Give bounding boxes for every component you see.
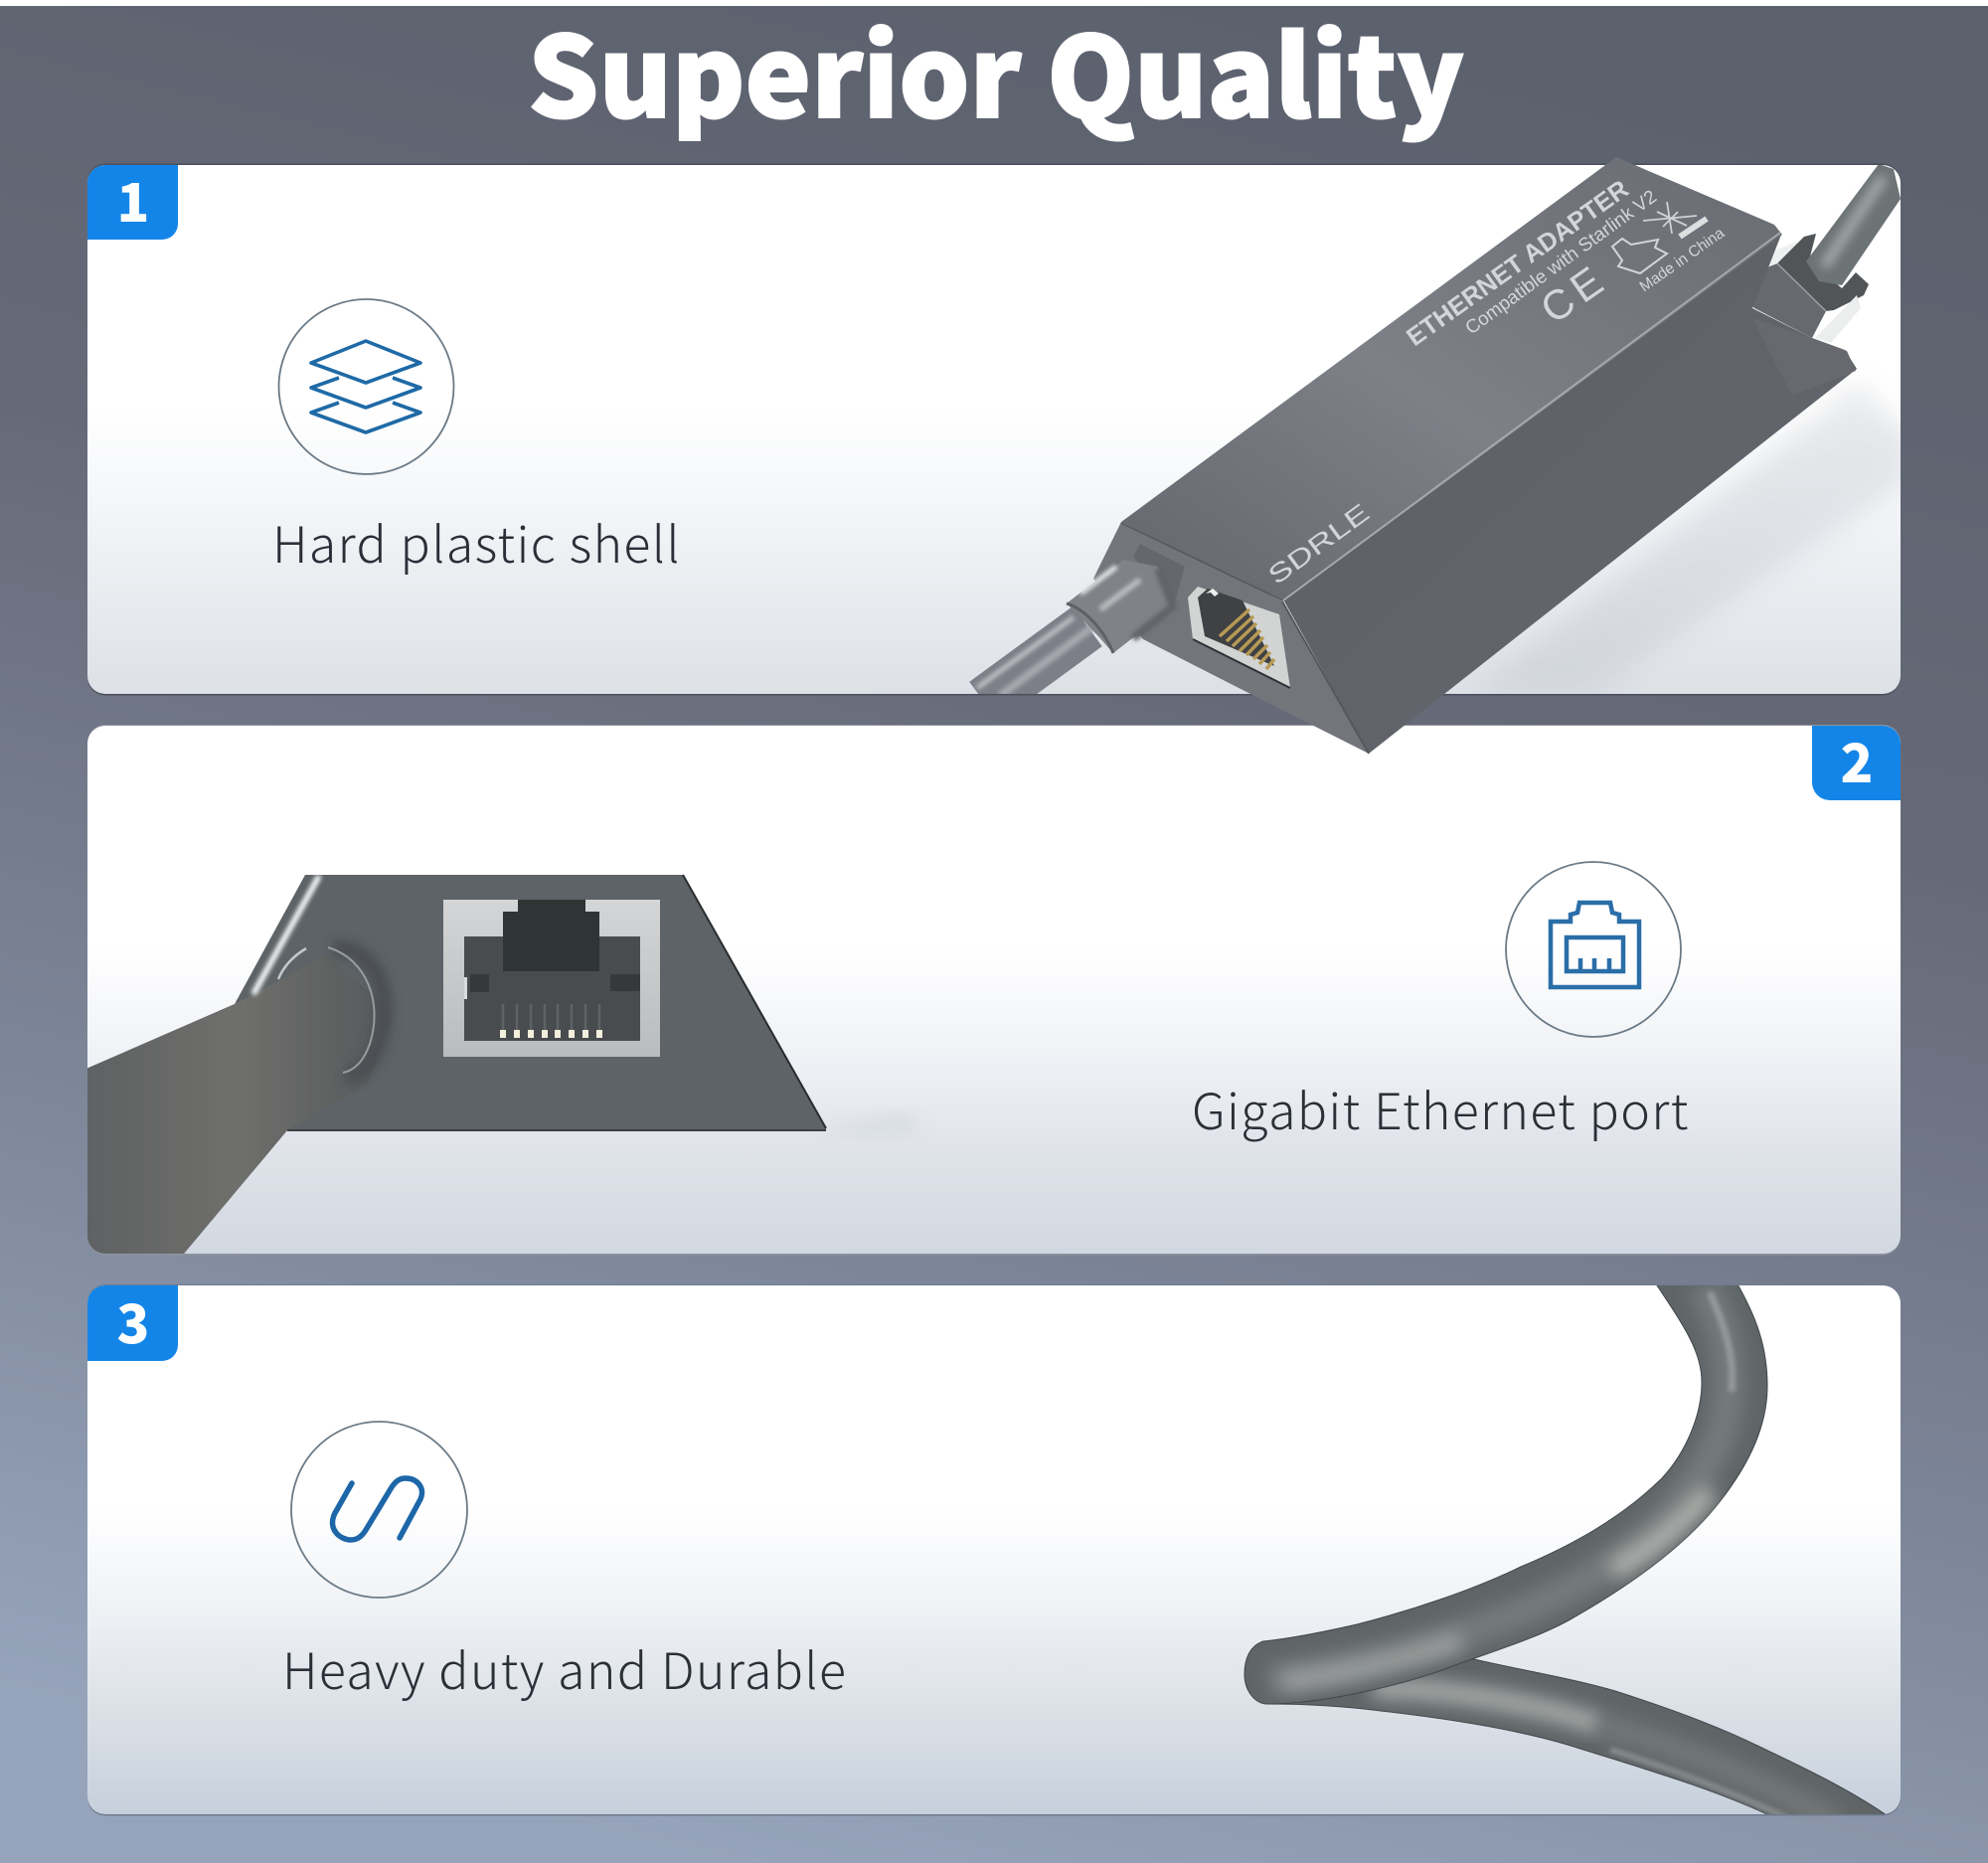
boot socket [1133,544,1185,608]
front cable [977,617,1093,702]
adapter product image [977,157,1901,754]
caption: heavy duty and durable: Heavy duty and Durable [282,1632,847,1704]
shadow beneath adapter [1504,386,1901,690]
badge 3: 3 [117,1280,149,1359]
edge highlight [254,878,318,992]
caption: hard plastic shell: Hard plastic shell [272,506,681,578]
panel 3: heavy duty and durable [87,1280,1901,1824]
product label text: SDRLE [1262,497,1375,591]
product label text: ETHERNET ADAPTER [1402,175,1634,352]
badge 3 [87,1280,178,1361]
icon: recycling house [1612,239,1667,273]
top face [1121,157,1782,601]
panel 2: gigabit ethernet port [80,720,1901,1255]
badge 1: 1 [117,159,149,238]
panel 1: hard plastic shell [87,159,1913,696]
product label text: CE [1532,254,1616,332]
rear wedge [1752,318,1856,396]
back connector [1730,234,1869,343]
icon: ethernet port [1506,862,1681,1037]
badge 1 [87,159,178,240]
caption: gigabit ethernet port: Gigabit Ethernet port [1192,1073,1690,1144]
side face [1283,235,1857,754]
upper strand [1244,1282,1767,1704]
product label text: Compatible with Starlink V2 [1462,186,1661,339]
badge 2: 2 [1841,720,1873,798]
icon: layers [278,299,453,474]
badge 2 [1812,720,1901,800]
adapter body [80,875,826,1254]
product label text: Made in China [1637,225,1728,295]
grommet [278,947,384,1075]
icon: crossed bin [1643,202,1697,234]
cable sleeve [1067,560,1173,653]
lower strand [1267,1659,1887,1824]
coiled cable [1244,1282,1887,1824]
RJ45 port [443,900,660,1057]
adapter port [1188,587,1290,688]
ridge highlight [1283,233,1780,600]
front face [1093,522,1369,754]
adapter front view [80,875,914,1254]
product label text [1262,175,1728,591]
icon: flexible cable [291,1422,467,1598]
back cable [1806,164,1901,285]
icon: weee bar [1680,219,1707,237]
